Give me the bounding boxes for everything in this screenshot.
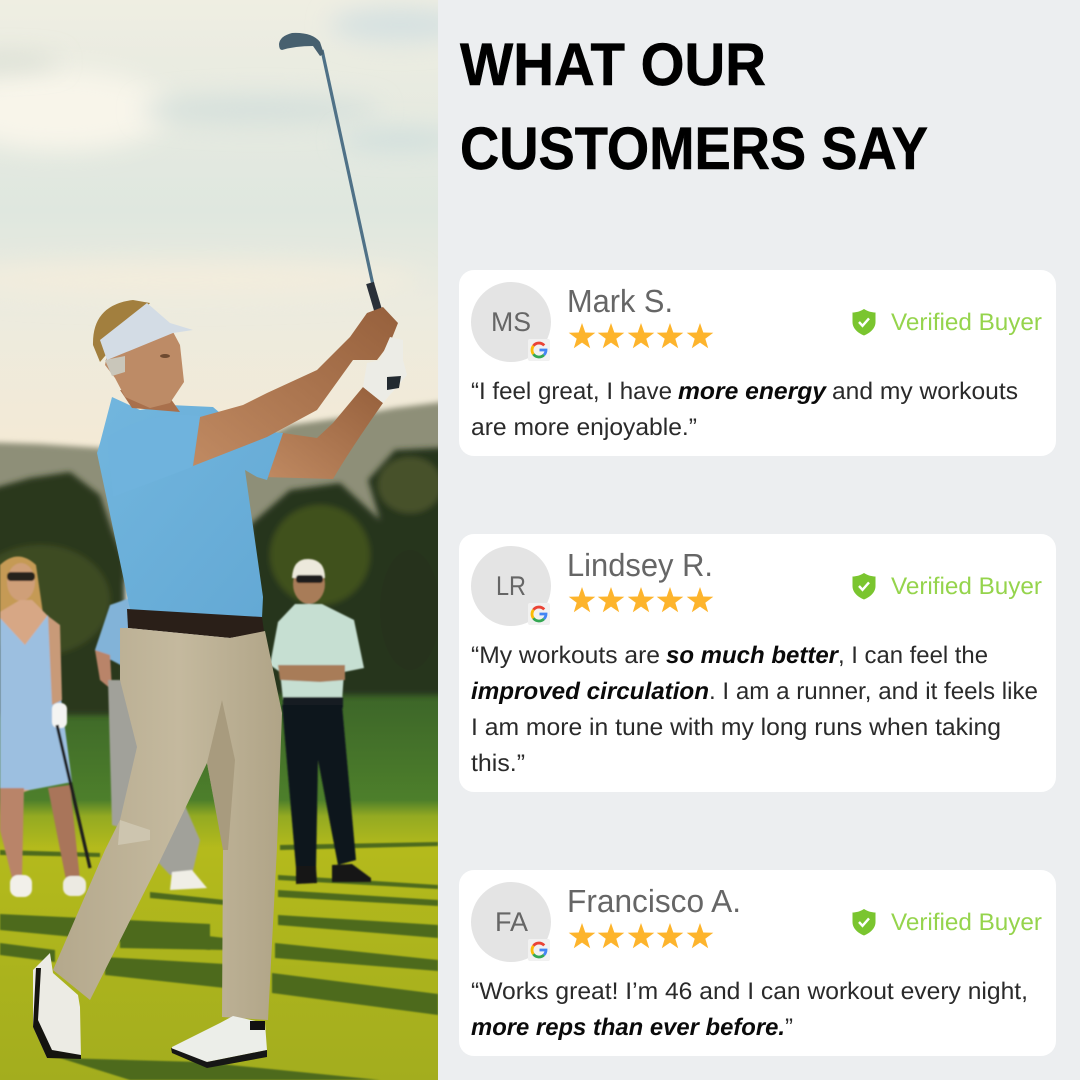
verified buyer badge: Verified Buyer (891, 573, 1042, 600)
five star rating (569, 587, 713, 612)
card background (459, 870, 1056, 1056)
tree line (0, 447, 458, 715)
review quote: so much better (666, 642, 840, 669)
verified buyer badge: Verified Buyer (891, 909, 1042, 936)
distant hills (0, 400, 458, 580)
five star rating (569, 323, 713, 348)
photo: golfer mid-swing on a sunlit course (0, 0, 470, 1080)
neck and head (93, 300, 193, 412)
shirt (97, 397, 283, 618)
review quote: “My workouts are (471, 642, 660, 669)
title: WHAT OUR (460, 31, 766, 98)
belt (127, 609, 264, 638)
golf club (279, 33, 378, 310)
bystander: man with cap and navy trousers (270, 559, 371, 884)
panel: review by Mark S. (459, 270, 1056, 456)
review quote: I am more in tune with my long runs when taking (471, 714, 1001, 741)
panel: review by Lindsey R. (459, 534, 1056, 792)
reviewer name: Francisco A. (567, 883, 741, 919)
review quote (471, 642, 1038, 777)
avatar FA (471, 882, 551, 962)
review quote: improved circulation (471, 678, 709, 705)
avatar LR (471, 546, 551, 626)
title: CUSTOMERS SAY (460, 115, 928, 182)
five star rating (569, 923, 713, 948)
review quote: and my workouts (832, 378, 1018, 405)
sky with clouds (0, 0, 438, 450)
golfer (33, 300, 407, 1068)
card background (459, 534, 1056, 792)
avatar FA: FA (495, 907, 528, 937)
near arm and sleeve (193, 307, 398, 466)
review quote: this.” (471, 750, 525, 777)
review quote: , I can feel the (838, 642, 988, 669)
verified buyer badge: Verified Buyer (891, 309, 1042, 336)
avatar MS (471, 282, 551, 362)
review quote (471, 378, 1018, 441)
review quote: more energy (678, 378, 828, 405)
review quote (471, 978, 1028, 1041)
far arm (263, 387, 383, 479)
title (460, 31, 928, 182)
fairway shadows (0, 842, 438, 1080)
review quote: are more enjoyable.” (471, 414, 697, 441)
review quote: “I feel great, I have (471, 378, 672, 405)
fairway (0, 680, 438, 1080)
avatar LR: LR (496, 571, 526, 601)
review quote: . I am a runner, and it feels like (709, 678, 1038, 705)
bystander: man behind golfer (95, 598, 207, 890)
review quote: more reps than ever before. (471, 1014, 785, 1041)
gloved hands (363, 337, 407, 403)
avatar MS: MS (491, 307, 531, 337)
reviewer name: Mark S. (567, 283, 673, 319)
trousers (53, 628, 282, 1020)
reviewer name: Lindsey R. (567, 547, 713, 583)
review quote: ” (785, 1014, 793, 1041)
front shoe (172, 1016, 267, 1062)
review quote: “Works great! I’m 46 and I can workout every night, (471, 978, 1028, 1005)
rear shoe (33, 953, 81, 1058)
card background (459, 270, 1056, 456)
bystander: woman in blue dress (0, 556, 90, 897)
panel: review by Francisco A. (459, 870, 1056, 1056)
